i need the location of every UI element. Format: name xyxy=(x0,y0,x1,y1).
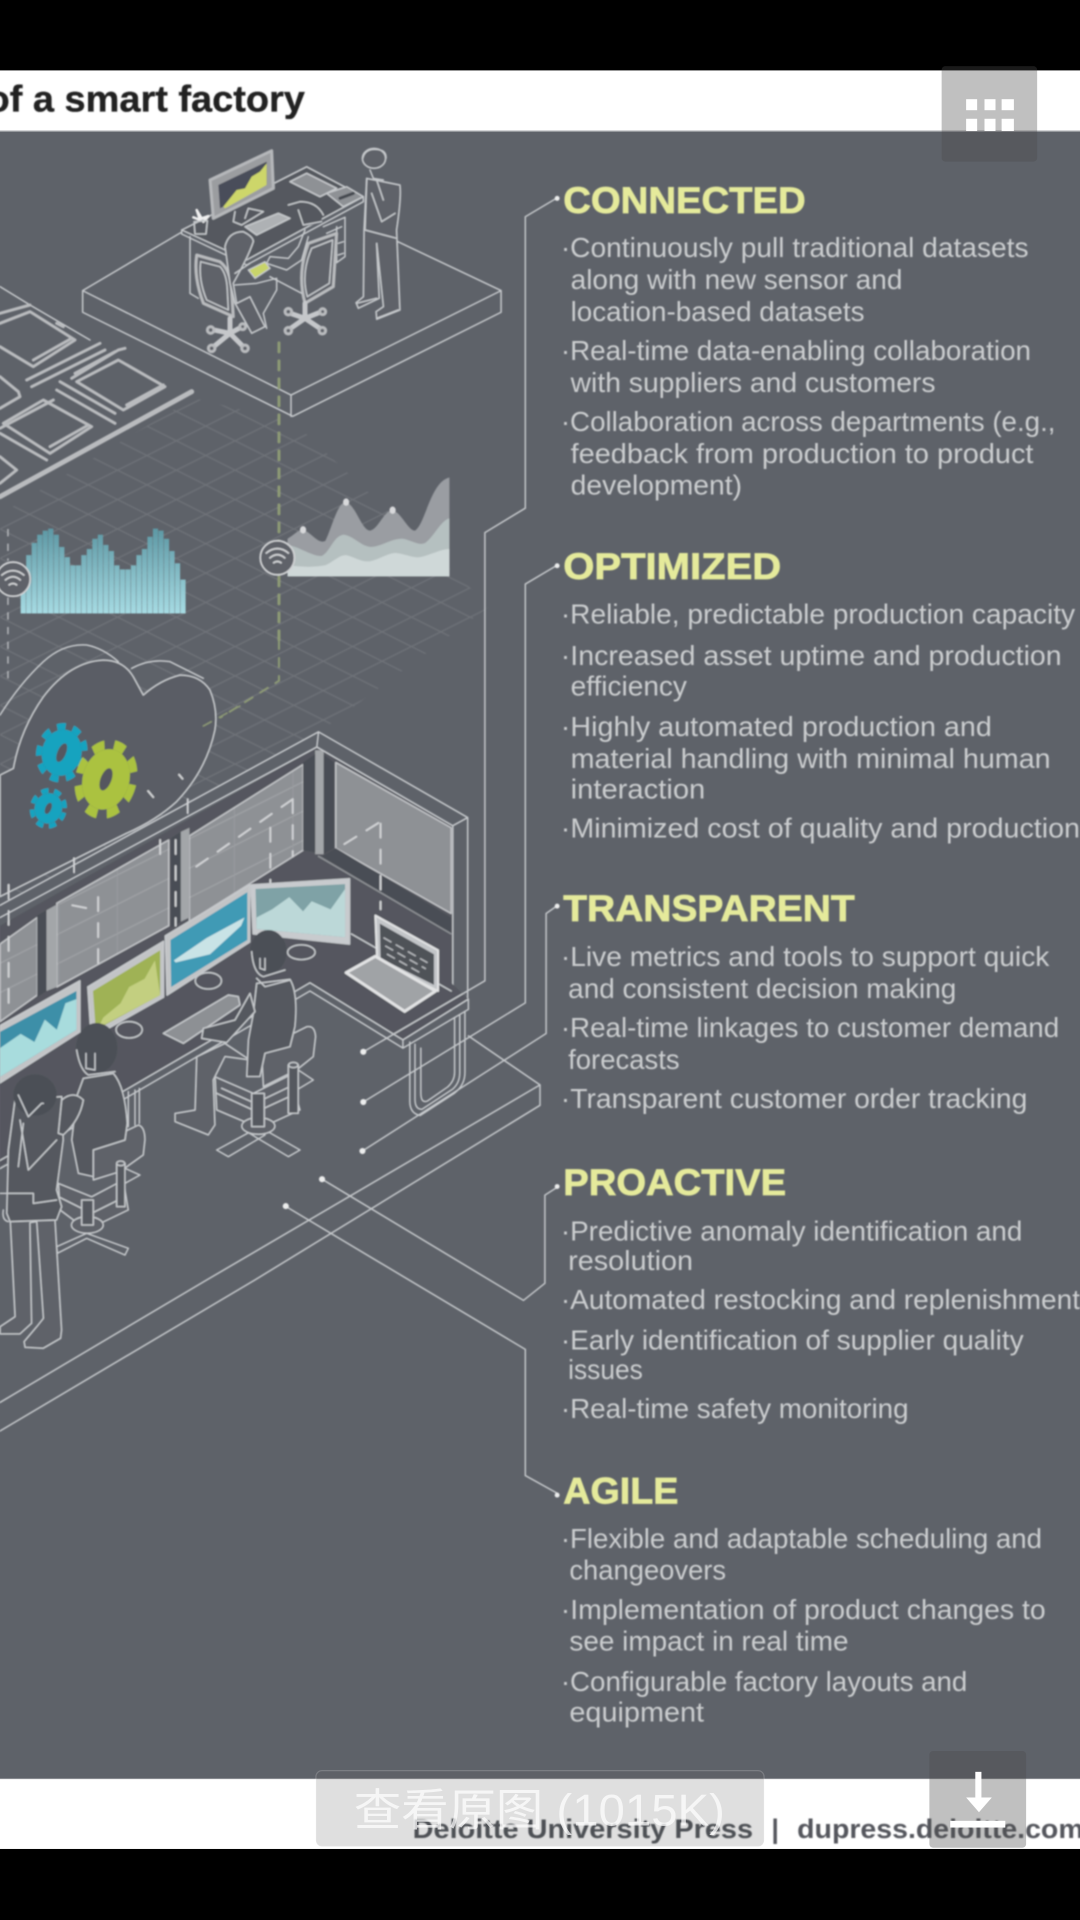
text: agile bullets xyxy=(561,1523,1046,1728)
text: proactive bullets: issues xyxy=(568,1354,643,1385)
machine floor plan xyxy=(0,287,192,497)
heading: transparent: TRANSPARENT xyxy=(563,888,855,929)
plant xyxy=(193,210,208,234)
left office worker xyxy=(225,232,277,333)
text: optimized bullets: efficiency xyxy=(571,671,688,702)
text: connected bullets: along with new sensor and xyxy=(571,264,902,295)
text: agile bullets: ·Implementation of product changes to xyxy=(561,1594,1046,1625)
leader end dots xyxy=(283,196,560,1498)
standing man xyxy=(356,148,400,319)
keyboard xyxy=(245,213,290,235)
white footer band xyxy=(0,1779,1080,1849)
teal bar chart xyxy=(21,529,186,613)
seated operator left and supervisor xyxy=(0,1023,145,1348)
section: proactive xyxy=(561,1162,1080,1424)
left chair xyxy=(196,255,248,352)
right area chart xyxy=(288,478,449,576)
table leg loop xyxy=(410,1011,465,1116)
text: proactive bullets: ·Predictive anomaly identification and xyxy=(561,1215,1022,1246)
text: agile bullets: ·Flexible and adaptable scheduling and xyxy=(561,1523,1042,1554)
text: connected bullets: ·Collaboration across departments (e.g., xyxy=(561,406,1056,437)
supervisor head xyxy=(0,1074,57,1222)
text: connected bullets: ·Real-time data-enabling collaboration xyxy=(561,335,1031,366)
gears xyxy=(28,721,141,830)
leader: proactive xyxy=(322,1179,558,1300)
machine rails xyxy=(0,343,192,497)
text: transparent bullets: ·Real-time linkages to customer demand xyxy=(561,1012,1059,1043)
text: proactive bullets: ·Automated restocking and replenishment xyxy=(561,1284,1080,1315)
top black bar xyxy=(0,0,1080,70)
text: optimized bullets: ·Reliable, predictable production capacity xyxy=(561,598,1076,629)
floor grid xyxy=(0,398,490,906)
machine bed 2 xyxy=(72,348,165,410)
chair base xyxy=(217,1128,300,1157)
icon: wifi badge left xyxy=(0,562,30,596)
right office worker xyxy=(267,202,323,293)
text: proactive bullets: ·Early identification of supplier quality xyxy=(561,1324,1025,1355)
icon: grid dots xyxy=(966,99,1014,131)
text: transparent bullets: ·Transparent customer order tracking xyxy=(561,1083,1027,1114)
view original button: 查看原图 (1015K) xyxy=(354,1787,725,1836)
grid menu button xyxy=(942,66,1037,162)
text: optimized bullets: ·Increased asset uptime and production xyxy=(561,640,1062,671)
left dashed connector xyxy=(7,529,9,686)
gear: teal large xyxy=(33,721,90,784)
heading: proactive: PROACTIVE xyxy=(563,1162,786,1203)
laptop xyxy=(346,916,438,1011)
pillars xyxy=(37,750,451,997)
heading: connected: CONNECTED xyxy=(563,180,806,221)
text: agile bullets: see impact in real time xyxy=(569,1626,849,1657)
office desk scene xyxy=(182,148,400,352)
footer credit: | xyxy=(771,1814,779,1844)
section: optimized xyxy=(561,546,1080,844)
monitor: teal chart xyxy=(0,981,80,1083)
main floor platform xyxy=(0,1036,540,1431)
download button xyxy=(929,1751,1026,1848)
chair xyxy=(215,1026,316,1134)
supervisor legs xyxy=(0,1217,62,1348)
dashed connector to cloud xyxy=(220,640,279,718)
head xyxy=(250,930,290,987)
text: transparent bullets: forecasts xyxy=(568,1044,680,1075)
desk surface xyxy=(0,856,468,1169)
right chair xyxy=(285,233,337,334)
text: connected bullets: with suppliers and customers xyxy=(570,367,936,398)
text: connected bullets: feedback from production to product xyxy=(571,438,1034,469)
leader lines xyxy=(285,197,558,1494)
heading: optimized: OPTIMIZED xyxy=(563,546,781,587)
illustration: control room xyxy=(0,640,540,1431)
heading: agile: AGILE xyxy=(563,1471,678,1512)
footer credit: dupress.deloitte.com xyxy=(797,1814,1080,1844)
text: transparent bullets xyxy=(561,941,1059,1114)
office platform xyxy=(83,233,501,416)
text: transparent bullets: and consistent decision making xyxy=(568,973,956,1004)
desk xyxy=(182,167,363,298)
leader: connected xyxy=(363,197,558,1052)
text: connected bullets xyxy=(561,232,1056,501)
dashed connector xyxy=(277,343,280,640)
text: agile bullets: equipment xyxy=(569,1697,704,1728)
chair xyxy=(58,1125,145,1233)
text: connected bullets: location-based datasets xyxy=(571,296,864,327)
leader: optimized xyxy=(363,564,558,1102)
section: agile xyxy=(561,1471,1046,1728)
text: optimized bullets: ·Highly automated production and xyxy=(561,711,992,742)
illustration: platform and charts xyxy=(21,233,501,640)
head xyxy=(76,1023,117,1075)
section: connected xyxy=(561,180,1056,501)
gear: lime xyxy=(71,738,141,821)
text: connected bullets: development) xyxy=(571,470,742,501)
monitor: green chart xyxy=(88,941,164,1038)
machine bed 1 xyxy=(0,305,75,367)
bottom black bar xyxy=(0,1849,1080,1920)
text: connected bullets: ·Continuously pull traditional datasets xyxy=(561,232,1029,263)
arm xyxy=(202,993,255,1043)
supervisor torso xyxy=(7,1097,63,1222)
leader: transparent xyxy=(362,905,558,1151)
icon: download arrow xyxy=(950,1772,1005,1828)
icon: wifi badge right xyxy=(260,541,294,575)
cloud xyxy=(0,645,240,897)
glass panels xyxy=(0,762,451,1022)
torso xyxy=(247,979,296,1077)
text: optimized bullets xyxy=(561,598,1080,844)
chair base xyxy=(57,1233,128,1255)
torso xyxy=(72,1073,127,1177)
dashed lines in glass xyxy=(9,775,381,1007)
text: agile bullets: changeovers xyxy=(569,1555,726,1586)
text: proactive bullets xyxy=(561,1215,1080,1424)
seated operator right xyxy=(163,930,316,1157)
cubicle top frame xyxy=(0,732,468,999)
monitor: teal grey chart xyxy=(251,879,350,960)
gear: teal small xyxy=(28,787,69,830)
view original button xyxy=(316,1771,764,1847)
text: transparent bullets: ·Live metrics and tools to support quick xyxy=(561,941,1050,972)
text: optimized bullets: interaction xyxy=(571,773,705,804)
cubicle backing xyxy=(0,747,453,1167)
section: transparent xyxy=(561,888,1059,1114)
keyboard xyxy=(163,995,240,1043)
monitor with green chart xyxy=(210,151,273,225)
glass grid texture xyxy=(0,764,303,1022)
desk legs xyxy=(128,1088,139,1127)
leader: agile xyxy=(285,1206,558,1494)
desk documents xyxy=(290,173,363,207)
text: proactive bullets: ·Real-time safety monitoring xyxy=(561,1393,909,1424)
leg xyxy=(175,1043,250,1135)
text: optimized bullets: material handling with minimal human xyxy=(571,743,1051,774)
footer credit xyxy=(413,1814,1080,1844)
text: optimized bullets: ·Minimized cost of quality and production xyxy=(561,813,1080,844)
text: proactive bullets: resolution xyxy=(568,1245,693,1276)
text: agile bullets: ·Configurable factory layouts and xyxy=(561,1666,967,1697)
machine bed 3 xyxy=(0,400,92,460)
tablet xyxy=(248,262,270,278)
supervisor arm xyxy=(58,1095,83,1135)
monitor: blue chart xyxy=(165,885,250,995)
footer credit: Deloitte University Press xyxy=(413,1814,753,1844)
white header band xyxy=(0,70,1080,132)
